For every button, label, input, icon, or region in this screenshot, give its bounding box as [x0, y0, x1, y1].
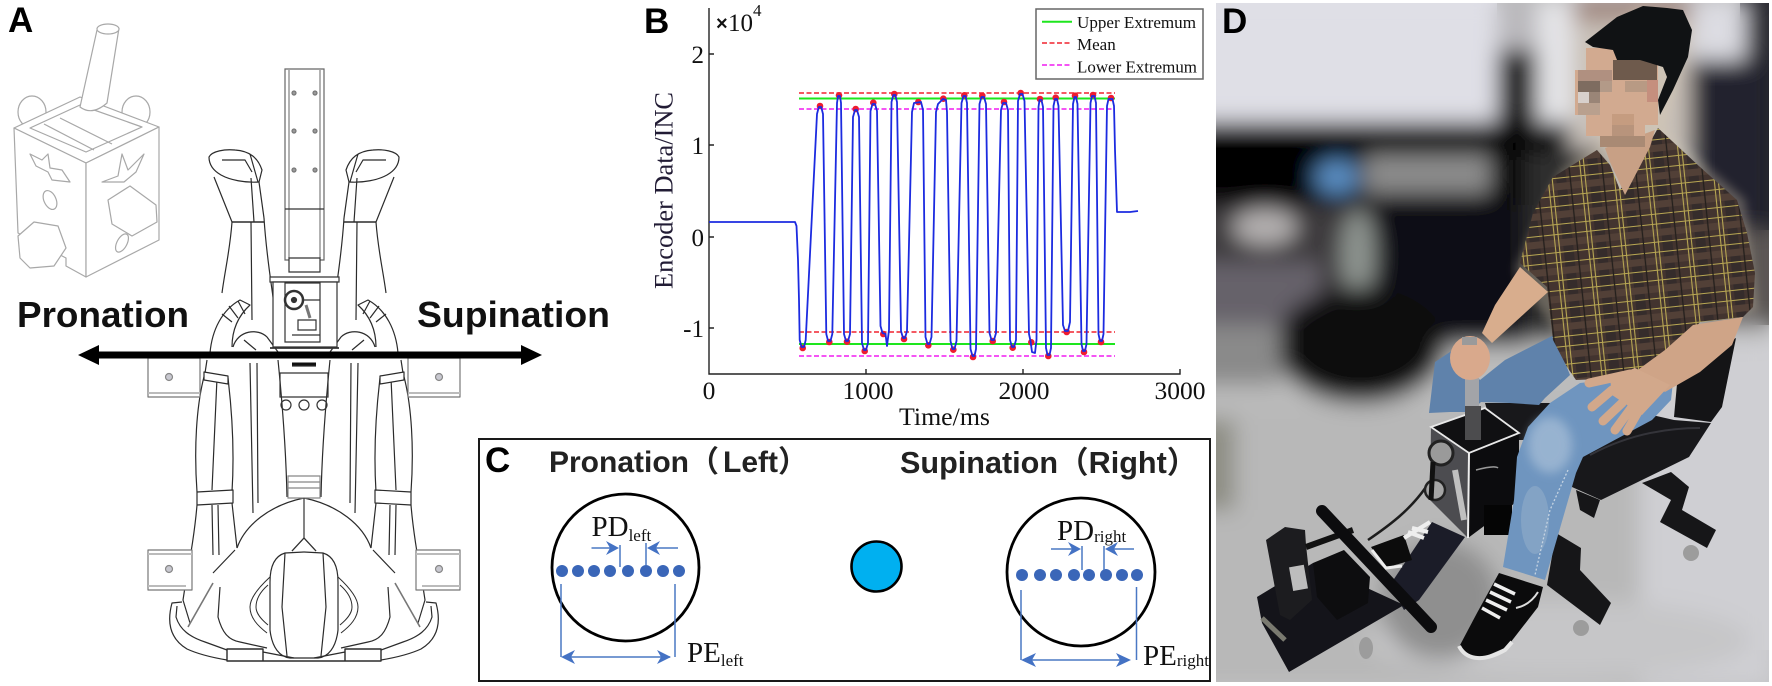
- main top view of user and device: left half: [148, 150, 304, 661]
- label Supination: Supination: [417, 294, 610, 335]
- pixelated face: [1575, 48, 1658, 147]
- PE right label: right: [1177, 651, 1209, 670]
- centre cursor circle: [852, 542, 902, 592]
- control handle shaft: [1465, 378, 1481, 440]
- left target circle: [552, 494, 744, 670]
- handle cap: [1462, 337, 1477, 345]
- side mount top: [148, 358, 200, 397]
- x tick labels: [703, 376, 1206, 405]
- heading: pronation left: Pronation（Left）: [549, 446, 808, 479]
- PE left label: left: [721, 651, 744, 670]
- multiplier label: 10: [728, 10, 753, 37]
- x tick labels: 3000: [1154, 376, 1206, 405]
- legend: Mean: [1077, 35, 1116, 54]
- PE left label: PE: [687, 637, 721, 669]
- chair back and seat: [1485, 338, 1736, 500]
- far forearm and hand on knee: [1589, 317, 1743, 431]
- x tick labels: 0: [703, 376, 715, 405]
- seat frame: [170, 602, 227, 660]
- multiplier label: 4: [753, 1, 762, 20]
- panel C: pronation and supination task display: [479, 439, 1210, 681]
- panel label A: A: [8, 1, 33, 40]
- panel label B: B: [644, 2, 669, 41]
- hair: [1585, 6, 1692, 115]
- foot: [209, 150, 262, 182]
- multiplier label: [716, 1, 762, 37]
- neck: [1605, 130, 1655, 195]
- axes: [709, 8, 1180, 374]
- x axis title: Time/ms: [899, 402, 990, 431]
- PD left label: PD: [592, 511, 629, 543]
- far shoe: [1371, 522, 1430, 568]
- panel A: device schematic: [8, 1, 610, 661]
- photo base tones behind the blur: [1216, 3, 1769, 682]
- thigh: [196, 360, 233, 492]
- panel D: photo of user seated on the device: [1216, 3, 1769, 682]
- centre rails: [250, 360, 287, 513]
- gripping hand: [1450, 336, 1490, 380]
- y tick labels: [683, 42, 704, 343]
- y tick labels: 0: [692, 225, 704, 252]
- legend: Lower Extremum: [1077, 58, 1197, 77]
- PE right label: PE: [1143, 640, 1177, 672]
- extrema markers: [799, 90, 1114, 360]
- side mount bottom: [148, 550, 192, 590]
- heading: supination right: Supination（Right）: [900, 446, 1197, 480]
- legend: [1036, 9, 1203, 79]
- near arm: [1482, 267, 1548, 343]
- near shoe: [1459, 573, 1543, 660]
- x tick labels: 1000: [842, 376, 894, 405]
- isometric device sketch: [14, 24, 159, 277]
- panel label C: C: [485, 441, 510, 480]
- knee pad: [210, 300, 250, 353]
- reference lines: [799, 93, 1115, 356]
- right target circle: [1007, 498, 1209, 672]
- legend: Upper Extremum: [1077, 13, 1196, 32]
- device base arm and platform: [1257, 487, 1465, 672]
- far leg jeans: [1429, 335, 1570, 413]
- double arrow: pronation to supination: [78, 345, 542, 365]
- plaid shirt: [1520, 128, 1755, 380]
- PD right label: right: [1094, 527, 1126, 546]
- shin: [222, 218, 279, 340]
- y tick labels: 1: [692, 133, 704, 160]
- near leg jeans: [1503, 373, 1674, 580]
- y tick labels: 2: [692, 42, 704, 69]
- blurred room background: [1216, 3, 1769, 682]
- device housing: [1425, 408, 1519, 538]
- vertical column and central actuator: [270, 69, 339, 551]
- PD left label: left: [629, 526, 652, 545]
- chair legs and casters: [1359, 472, 1716, 659]
- encoder signal curve: [709, 94, 1138, 356]
- label Pronation: Pronation: [17, 294, 189, 335]
- back and head: [237, 498, 304, 548]
- panel label D: D: [1222, 2, 1247, 41]
- x tick labels: 2000: [998, 376, 1050, 405]
- y axis title: Encoder Data/INC: [648, 92, 678, 289]
- panel B: encoder data chart: [644, 1, 1206, 431]
- soft halo around subject: [1515, 5, 1758, 400]
- multiplier label: ×: [716, 13, 728, 35]
- PD right label: PD: [1057, 515, 1094, 547]
- y tick labels: -1: [683, 316, 704, 343]
- panel frame: [479, 439, 1210, 681]
